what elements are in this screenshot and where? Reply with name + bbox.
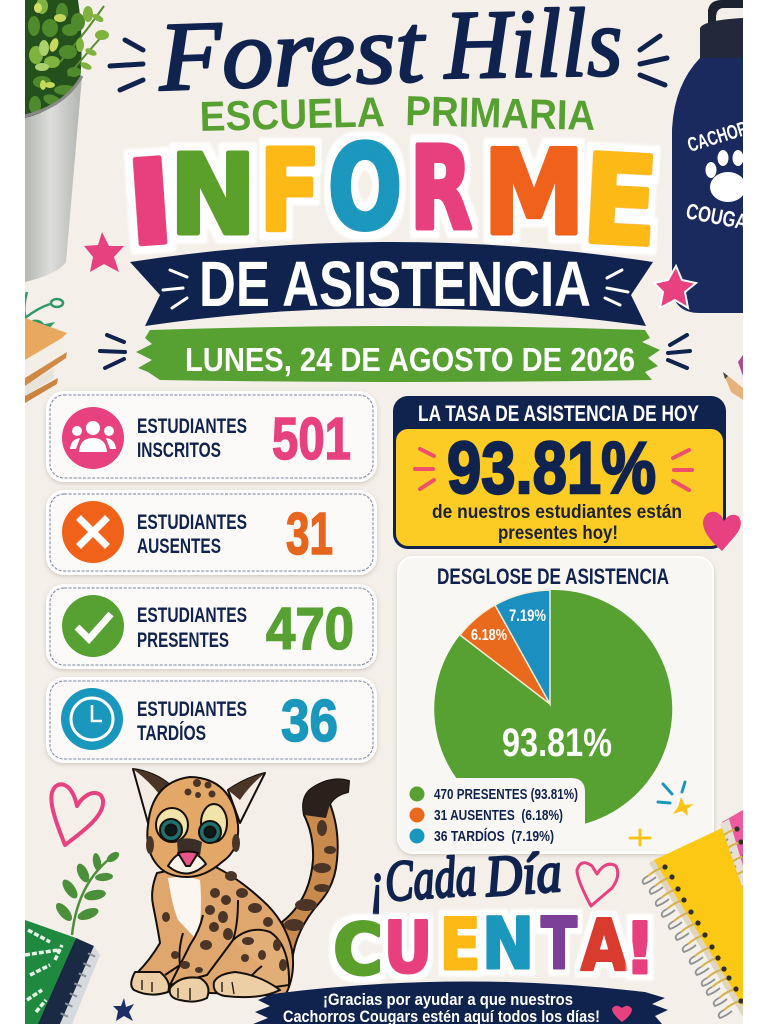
white chest [168,876,201,940]
chart legend: 36 TARDÍOS (7.19%) [434,828,554,845]
stat card: presentes: PRESENTES [137,629,229,652]
heading: CUENTA: ! [624,908,656,990]
stat card: tardios: 36 [281,688,338,754]
heading: CUENTA [333,903,656,991]
stat card: ausentes: AUSENTES [137,535,221,558]
stat card: tardios: TARDÍOS [137,722,206,745]
heading: INFORME: M [483,126,585,261]
haunch [233,930,289,992]
heading: CUENTA: T [541,904,577,985]
pie slice: presentes [434,590,672,828]
icon: check mark [62,595,124,657]
water bottle [672,0,751,313]
stat card: tardios: ESTUDIANTES [137,698,247,721]
body [135,863,293,996]
stat card: inscritos [47,392,376,481]
pie slice: tardios [495,590,550,704]
marble notebook [25,920,100,1024]
heading: INFORME: R [410,123,472,256]
thank you brush banner [253,981,668,1024]
heading: INFORME [122,122,661,274]
subtitle: Escuela Primaria: PRIMARIA [405,87,596,139]
pie slice: ausentes [460,605,550,704]
heading: INFORME: O [328,122,402,256]
stat card: presentes: 470 [266,596,354,662]
stat card: ausentes [47,491,376,574]
icon: group of students [62,407,124,469]
panel: attendance rate: 93.81% [447,428,656,509]
heading: CUENTA: A [581,906,627,987]
panel: pie chart: 93.81% [502,721,612,765]
heading: CUENTA: N [482,903,534,985]
plant in metal pot [25,0,109,282]
tail [282,779,349,962]
muzzle and nose [168,852,206,874]
heading: INFORME: F [259,126,321,257]
front legs [170,900,238,985]
banner: de asistencia: DE ASISTENCIA [199,248,591,320]
pencils right [723,355,743,400]
heading: INFORME: E [579,129,661,274]
icon: navy star [113,998,134,1021]
heading: INFORME: I [122,135,178,272]
paws [131,972,169,995]
panel: pie chart: 6.18% [471,627,507,644]
panel: pie chart: DESGLOSE DE ASISTENCIA [437,564,669,589]
pink star right [654,266,696,308]
icon: small heart [612,1006,632,1022]
panel: pie chart [398,557,713,853]
thank you brush banner: ¡Gracias por ayudar a que nuestros [323,990,573,1009]
closing: cada dia: ¡Cada [366,843,479,915]
icon: clock [61,688,123,750]
heading: CUENTA: E [439,905,481,986]
head [147,777,238,877]
eyes [156,808,188,842]
chart legend: 31 AUSENTES (6.18%) [434,807,563,824]
heading: INFORME: N [170,132,256,260]
subtitle: Escuela Primaria: ESCUELA [199,88,385,140]
panel: pie chart: 7.19% [509,606,546,625]
ears [133,769,170,823]
stat card: inscritos: 501 [272,406,351,472]
mascot: cougar cub [131,769,349,1002]
heading: CUENTA: C [333,910,383,991]
title: Forest Hills [110,0,667,112]
stat card: ausentes: 31 [286,501,333,567]
icon: paw print [706,150,746,202]
icon: cross [62,501,124,563]
water bottle: COUGA [684,198,750,235]
heading: CUENTA: U [384,908,432,989]
closing: cada dia: Día [483,839,564,909]
panel: attendance rate: LA TASA DE ASISTENCIA DE HOY [418,401,699,426]
date brush banner: LUNES, 24 DE AGOSTO DE 2026 [185,341,635,378]
stat card: tardios [47,678,376,762]
subtitle: Escuela Primaria [199,87,596,140]
spots [162,871,287,973]
panel: attendance rate: presentes hoy! [498,523,618,544]
doodle: heart beside text [577,863,618,906]
pink star left [84,232,124,272]
panel: attendance rate: de nuestros estudiantes están [432,502,682,523]
stat card: presentes: ESTUDIANTES [137,604,247,627]
doodle and books left [24,292,67,403]
stat card: ausentes: ESTUDIANTES [137,511,247,534]
panel: attendance rate [393,396,726,549]
stat card: presentes [47,585,376,668]
yellow and pink notebooks [643,810,755,1018]
icon: pink heart [703,512,741,551]
date brush banner [100,326,690,382]
stat card: inscritos: ESTUDIANTES [137,415,247,438]
chart legend: 470 PRESENTES (93.81%) [434,786,578,803]
doodle: outline heart [51,784,103,845]
doodle: green sprig [53,850,121,935]
stat card: inscritos: INSCRITOS [137,439,221,462]
chart legend [399,778,585,852]
sparkle doodles [630,782,694,845]
